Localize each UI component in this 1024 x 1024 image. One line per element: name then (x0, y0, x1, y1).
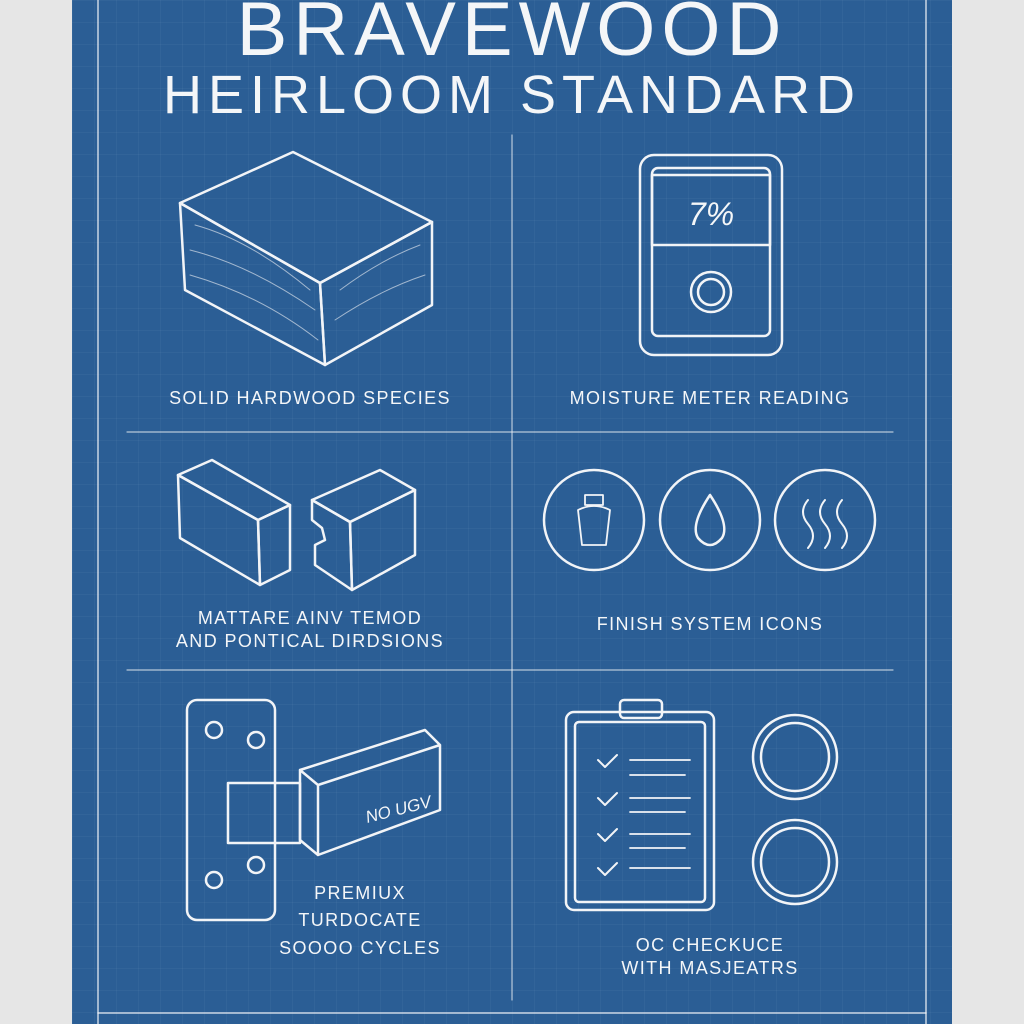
icon: finish circles (544, 470, 875, 570)
labels: SOLID HARDWOOD SPECIES (169, 388, 451, 408)
icon: seals (753, 715, 837, 904)
text: TURDOCATE (298, 910, 422, 930)
text: NO UGV (364, 792, 433, 827)
icon: clipboard (566, 700, 714, 910)
icon: moisture meter (640, 155, 782, 355)
text: WITH MASJEATRS (621, 958, 799, 978)
meter text: 7% (688, 196, 734, 232)
text: FINISH SYSTEM ICONS (597, 614, 823, 634)
text: PREMIUX (314, 883, 406, 903)
text: SOOOO CYCLES (279, 938, 441, 958)
text: HEIRLOOM STANDARD (163, 65, 861, 125)
icon: hinge (187, 700, 440, 920)
text: AND PONTICAL DIRDSIONS (176, 631, 444, 651)
text: MOISTURE METER READING (570, 388, 850, 408)
text: MATTARE AINV TEMOD (198, 608, 422, 628)
text: OC CHECKUCE (636, 935, 784, 955)
icon: joint blocks (178, 460, 415, 590)
icon: wood block (180, 152, 432, 365)
